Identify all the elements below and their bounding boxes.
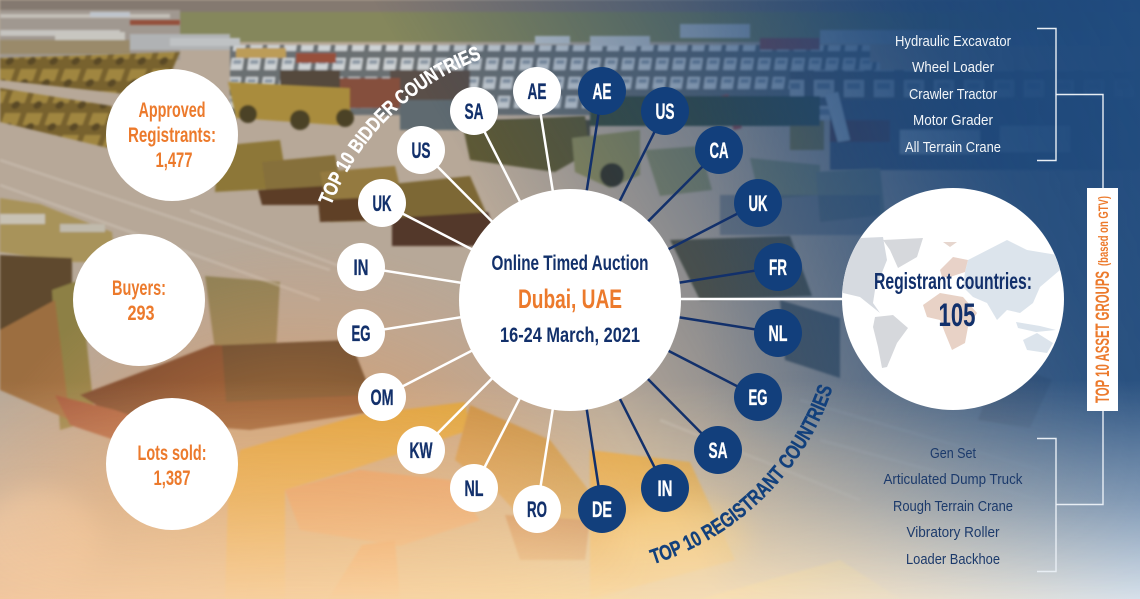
bubble EG [734,373,782,421]
bubble US [641,87,689,135]
bubble FR [754,243,802,291]
top asset list: Hydraulic Excavator [895,33,1011,50]
connector to registrant countries circle [680,298,845,300]
bubble RO: RO [527,497,547,522]
bubble SA: SA [708,438,728,463]
soft colour pools [0,398,850,590]
bubble RO [513,485,561,533]
bubble DE: DE [592,497,612,522]
bubble CA [695,126,743,174]
bubble SA [450,87,498,135]
rows of trucks and machines [0,12,1140,170]
bubble KW: KW [410,438,433,463]
vertical label: top 10 asset groups: TOP 10 ASSET GROUPS [1093,271,1114,403]
bubble NL [754,309,802,357]
vertical label: top 10 asset groups: (based on GTV) [1095,196,1111,266]
bubble EG: EG [352,321,370,346]
bubble IN: IN [658,476,672,501]
bubble AE [578,67,626,115]
bubble UK: UK [372,191,392,216]
bubble UK [734,179,782,227]
bottom asset list: Vibratory Roller [906,524,1000,541]
bubble UK: UK [748,191,768,216]
bubble IN [337,243,385,291]
panel: approved registrants [106,69,238,201]
bubble CA: CA [710,138,729,163]
top asset list [895,33,1011,156]
panel: lots sold: 1,387 [154,467,190,490]
panel: approved registrants: 1,477 [156,149,192,172]
panel: approved registrants: Approved [138,99,206,122]
registrant countries circle with world map: Registrant countries: [874,268,1032,294]
bottom asset list: Rough Terrain Crane [893,498,1013,515]
registrant countries circle with world map [842,188,1064,410]
top asset list: Crawler Tractor [909,86,997,103]
registrant countries circle with world map: 105 [938,297,976,333]
bottom asset list: Loader Backhoe [906,551,1000,568]
vertical label: top 10 asset groups [1087,188,1118,411]
bubble SA [694,426,742,474]
bubble AE [513,67,561,115]
bottom asset list: Gen Set [930,445,977,462]
far field and horizon [0,0,1140,60]
panel: buyers: Buyers: [112,277,166,300]
excavators at left [0,198,900,599]
bubble KW [397,426,445,474]
bubble UK [358,179,406,227]
central circle: auction details: 16-24 March, 2021 [500,324,640,347]
bubble OM [358,373,406,421]
bubble NL: NL [464,476,484,501]
world map [842,237,1060,368]
top asset list: Wheel Loader [912,59,994,76]
panel: buyers: 293 [128,302,154,325]
bubble US: US [656,99,674,124]
bidder country bubbles [337,67,561,533]
top asset list: All Terrain Crane [905,139,1001,156]
bubble NL: NL [768,321,788,346]
bubble IN [641,464,689,512]
bubble FR: FR [769,255,787,280]
bubble SA: SA [464,99,484,124]
curved heading: top 10 bidder countries: TOP 10 BIDDER COUNTRIES [318,46,480,203]
central circle: auction details [459,189,681,411]
top asset list: Motor Grader [913,112,993,129]
panel: approved registrants: Registrants: [128,124,216,147]
bubble DE [578,485,626,533]
bubble EG [337,309,385,357]
panel: lots sold: Lots sold: [138,442,206,465]
bubble IN: IN [354,255,368,280]
bubble US: US [412,138,430,163]
yellow machines [0,52,1052,428]
bubble AE: AE [592,79,612,104]
bubble AE: AE [528,79,546,104]
connector lines: registrant countries [570,91,778,509]
bubble NL [450,464,498,512]
bottom asset list: Articulated Dump Truck [884,471,1023,488]
panel: lots sold [106,398,238,530]
bubble OM: OM [370,385,394,410]
curved heading: top 10 registrant countries: TOP 10 REGISTRANT COUNTRIES [648,384,832,564]
bubble US [397,126,445,174]
central circle: auction details: Online Timed Auction [492,252,648,275]
light streaks on the ground [0,160,1040,500]
connector lines: bidder countries [361,91,570,509]
brackets linking lists to label [1037,28,1103,572]
panel: buyers [73,234,205,366]
central circle: auction details: Dubai, UAE [518,284,622,314]
registrant country bubbles [578,67,802,533]
bubble EG: EG [748,385,768,410]
bottom asset list [884,445,1023,568]
